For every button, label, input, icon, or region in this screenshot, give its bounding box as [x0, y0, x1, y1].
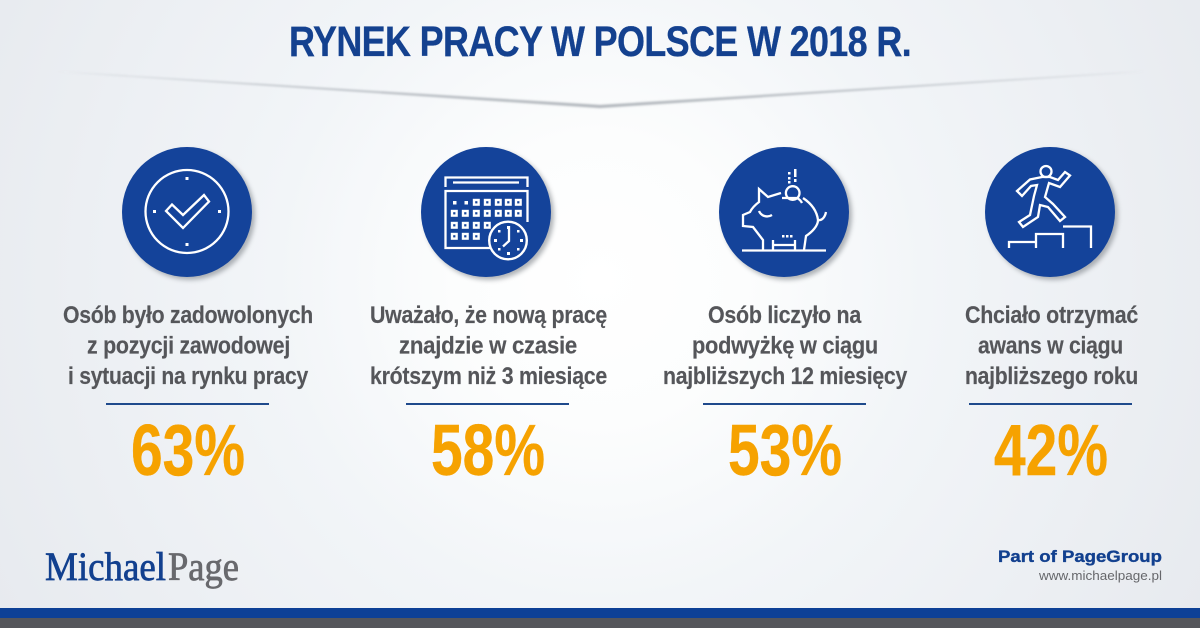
value: 63% [131, 411, 245, 491]
footer: group and website [998, 548, 1162, 583]
description [965, 302, 1138, 390]
value: 53% [728, 411, 842, 491]
description: awans w ciągu [978, 332, 1123, 360]
description: najbliższego roku [965, 363, 1138, 390]
description [370, 302, 607, 390]
description: Uważało, że nową pracę [370, 302, 607, 329]
description: podwyżkę w ciągu [692, 332, 878, 360]
icon: runner climbing steps [985, 147, 1118, 280]
description: Osób było zadowolonych [63, 302, 313, 329]
icon: calendar and clock [421, 147, 554, 280]
description: znajdzie w czasie [399, 332, 577, 360]
description [663, 302, 908, 390]
description: krótszym niż 3 miesiące [370, 363, 607, 390]
icon: piggy bank [719, 147, 852, 280]
title: RYNEK PRACY W POLSCE W 2018 R. [289, 18, 911, 66]
panel: pay rise [663, 147, 908, 491]
logo: Michael Page: Michael [45, 544, 166, 589]
description: najbliższych 12 miesięcy [663, 363, 908, 390]
value: 42% [994, 411, 1108, 491]
description: i sytuacji na rynku pracy [68, 363, 309, 390]
value: 58% [431, 411, 545, 491]
description: Osób liczyło na [708, 302, 862, 329]
description: z pozycji zawodowej [87, 332, 290, 360]
description [63, 302, 313, 390]
panel: promotion [965, 147, 1138, 491]
logo: Michael Page: Page [168, 544, 239, 589]
description: Chciało otrzymać [965, 302, 1138, 329]
logo: Michael Page [45, 544, 239, 589]
footer: group and website: Part of PageGroup [998, 548, 1162, 566]
panel: new job [370, 147, 607, 491]
icon: clock with check mark [122, 147, 255, 280]
chevron divider [50, 71, 1150, 108]
footer bars [0, 608, 1200, 628]
panel: satisfied [63, 147, 313, 491]
footer: group and website: www.michaelpage.pl [1038, 568, 1162, 583]
